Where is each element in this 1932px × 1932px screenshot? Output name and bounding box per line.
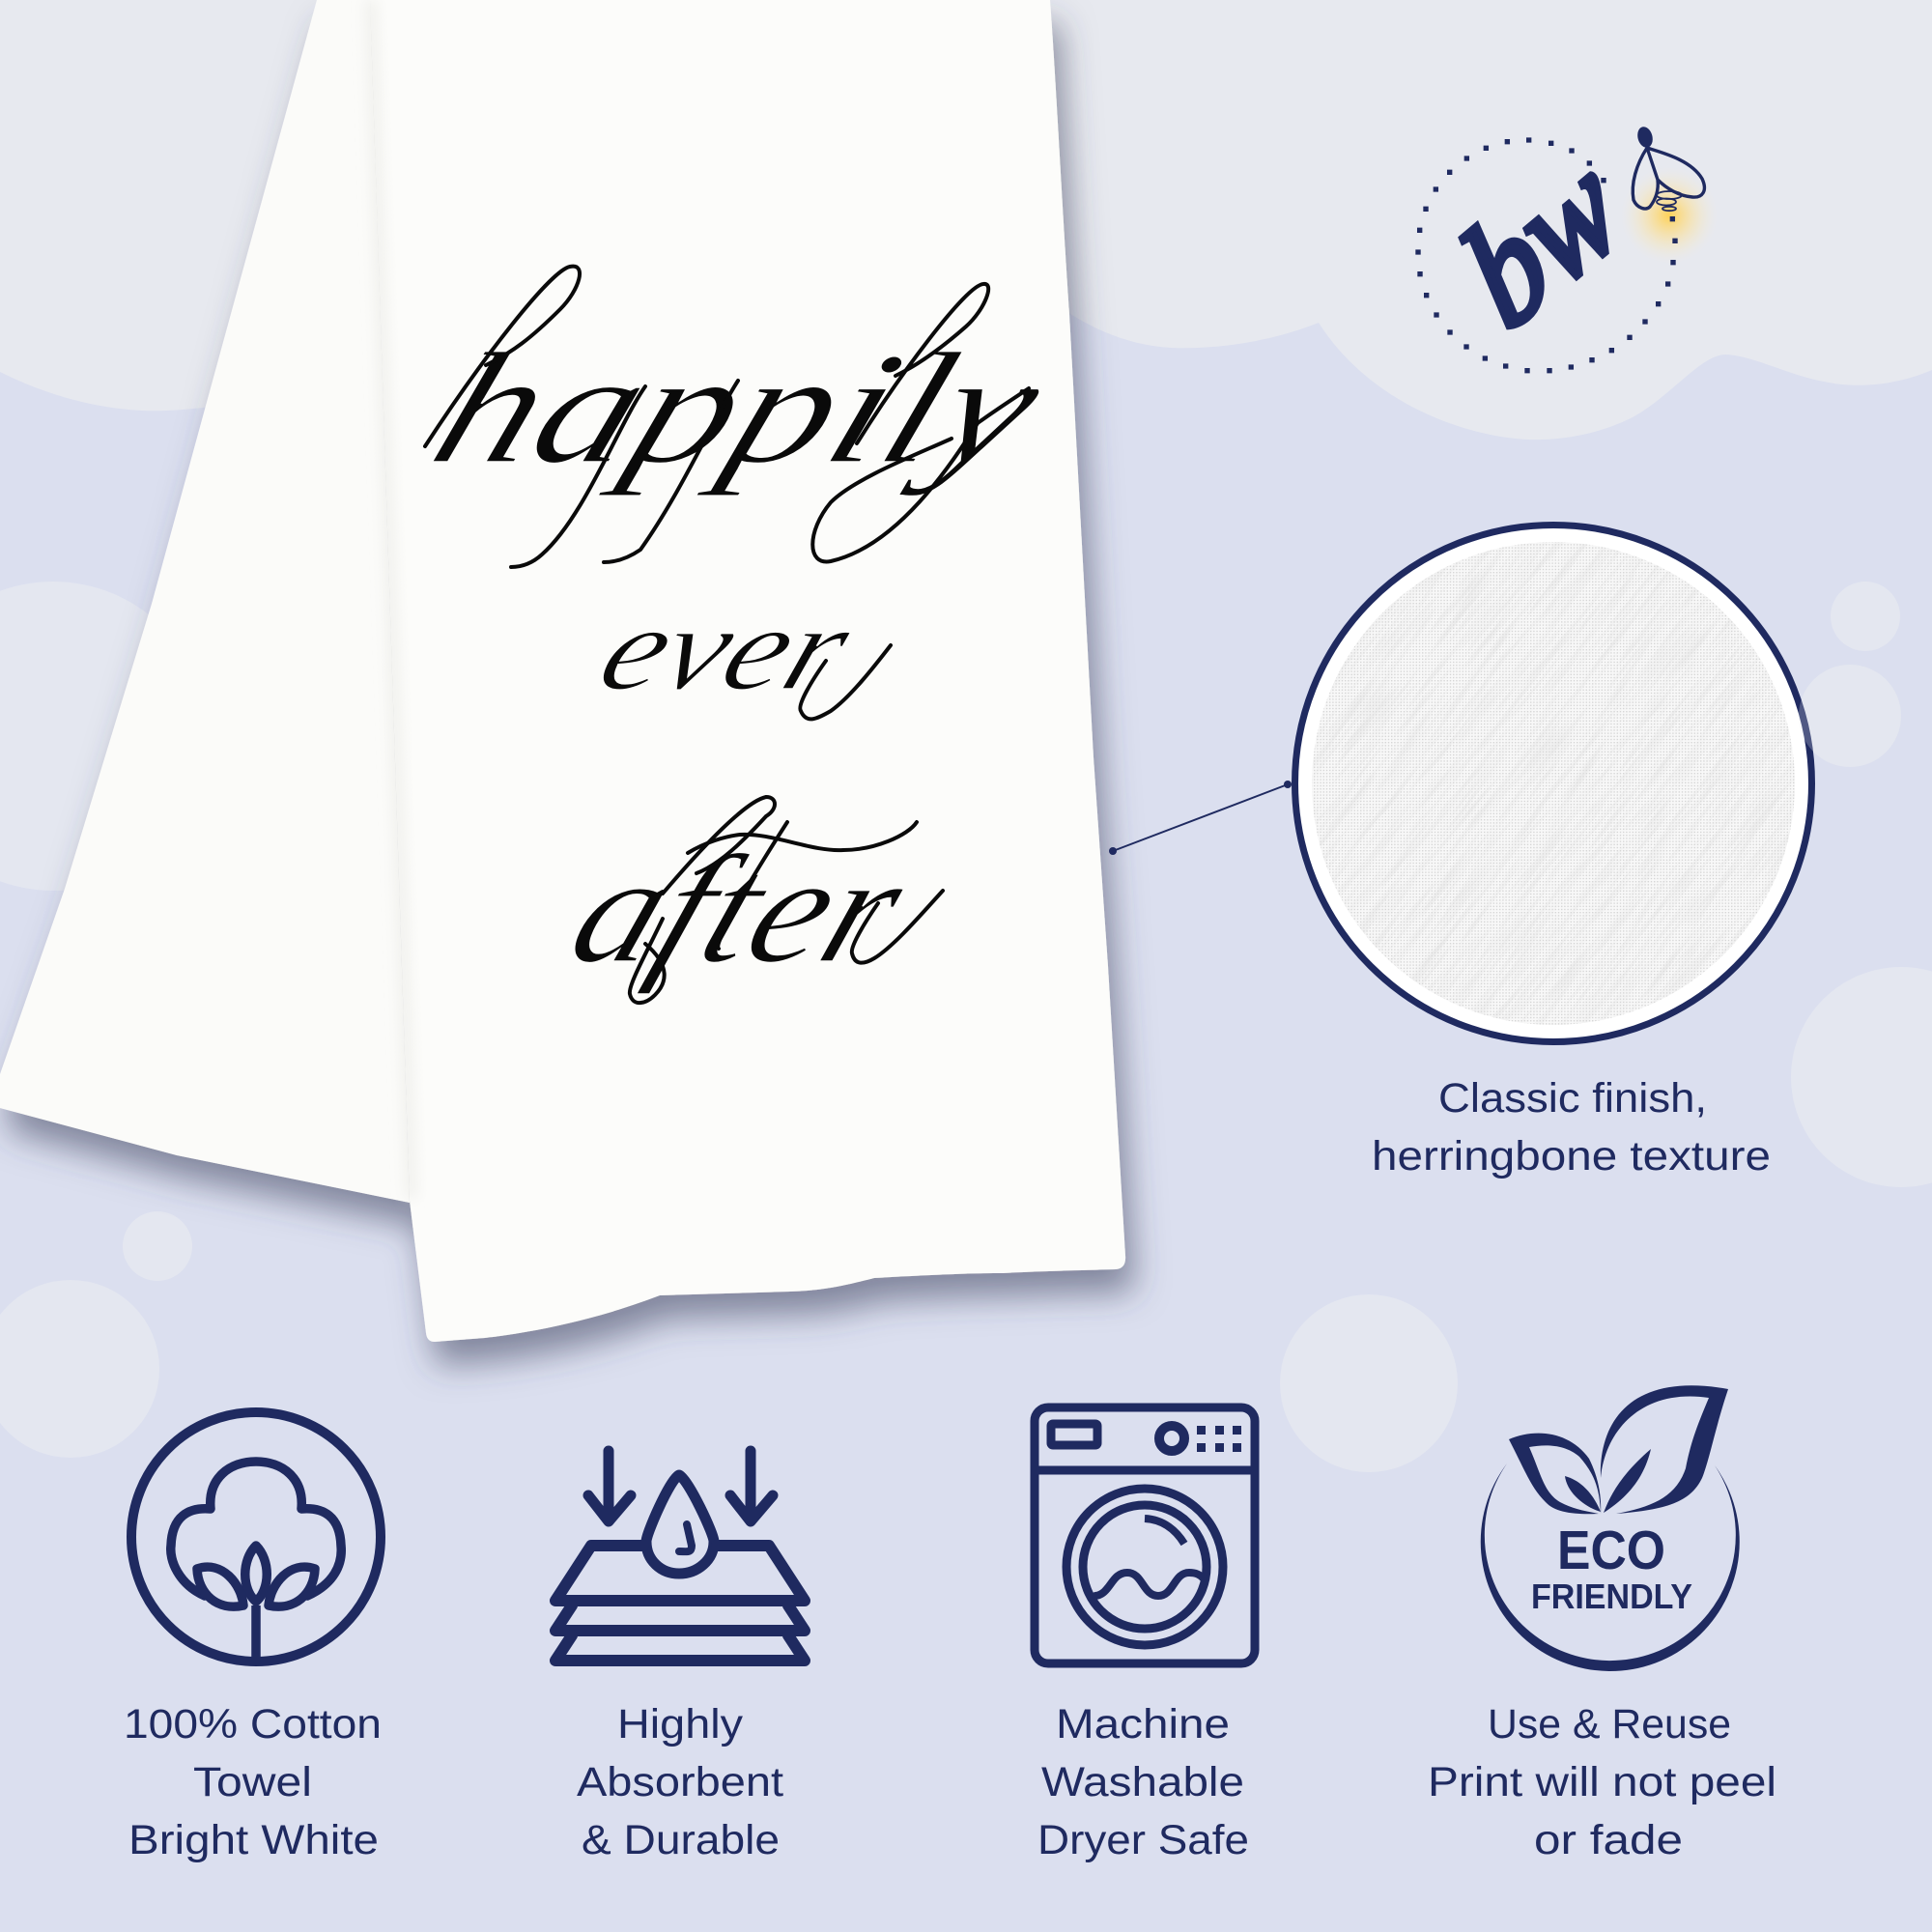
dotted circle bbox=[1418, 140, 1675, 371]
feature: eco friendly bbox=[1428, 1385, 1776, 1863]
label: cotton: 100% Cotton bbox=[124, 1701, 382, 1747]
towel silhouette with shadow bbox=[0, 0, 1125, 1342]
label: cotton bbox=[124, 1701, 382, 1863]
icon: eco badge: FRIENDLY bbox=[1531, 1577, 1692, 1616]
logo: firefly badge bbox=[1418, 120, 1718, 371]
label: washer: Dryer Safe bbox=[1037, 1817, 1249, 1863]
feature: cotton bbox=[124, 1412, 382, 1863]
feature: washer bbox=[1035, 1407, 1255, 1863]
connector line bbox=[1109, 781, 1292, 855]
label: cotton: Bright White bbox=[128, 1817, 379, 1863]
label: eco friendly: Print will not peel bbox=[1428, 1759, 1776, 1805]
label: absorbent bbox=[577, 1701, 783, 1863]
towel fold crease bbox=[371, 0, 412, 1198]
label: eco friendly: or fade bbox=[1534, 1817, 1683, 1863]
icon: water drop on layers bbox=[555, 1451, 805, 1661]
logo lettering: bw bbox=[1437, 120, 1647, 361]
label: eco friendly: Use & Reuse bbox=[1488, 1701, 1731, 1747]
label: washer: Washable bbox=[1041, 1759, 1244, 1805]
label: washer: Machine bbox=[1056, 1701, 1230, 1747]
texture caption bbox=[1372, 1075, 1771, 1179]
icon: cotton boll bbox=[131, 1412, 381, 1662]
label: washer bbox=[1037, 1701, 1249, 1863]
word: after: after bbox=[551, 824, 928, 995]
magnified fabric circle bbox=[1292, 522, 1815, 1045]
icon: washing machine bbox=[1035, 1407, 1255, 1663]
texture caption: herringbone texture bbox=[1372, 1133, 1771, 1179]
label: absorbent: Absorbent bbox=[577, 1759, 783, 1805]
word: happily bbox=[412, 267, 1066, 567]
texture caption: Classic finish, bbox=[1438, 1075, 1707, 1122]
towel quote: happily ever after bbox=[412, 267, 1066, 1003]
label: absorbent: Highly bbox=[617, 1701, 744, 1747]
icon: eco badge: ECO bbox=[1557, 1520, 1665, 1581]
firefly bbox=[1633, 125, 1704, 211]
feature: absorbent bbox=[555, 1451, 805, 1863]
icon: eco badge bbox=[1481, 1385, 1740, 1671]
towel bbox=[0, 0, 1125, 1342]
word: ever: ever bbox=[583, 582, 869, 715]
firefly glow bbox=[1621, 167, 1718, 264]
callout: fabric texture bbox=[1109, 522, 1815, 1179]
word: happily: happily bbox=[412, 320, 1066, 497]
label: eco friendly bbox=[1428, 1701, 1776, 1863]
label: cotton: Towel bbox=[193, 1759, 312, 1805]
label: absorbent: & Durable bbox=[582, 1817, 780, 1863]
